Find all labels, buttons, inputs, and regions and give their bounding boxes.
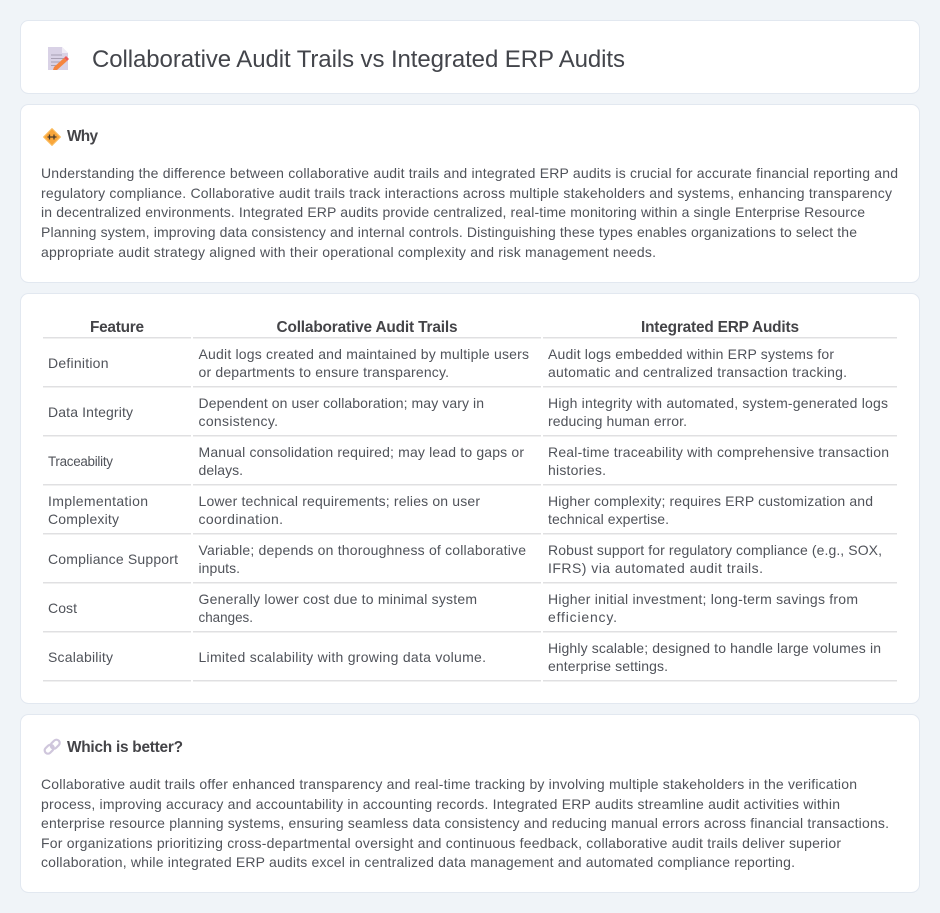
row: data integrity: Data Integrity [48,404,133,420]
text block: why: appropriate audit strategy aligned with their operational complexity and risk management needs. [41,244,656,260]
row: cost: Higher initial investment; long-term savings from [548,591,858,607]
row: scalability [48,640,881,674]
row: data integrity [48,395,888,429]
row: implementation complexity: Higher complexity; requires ERP customization and [548,493,873,509]
icon: link [43,738,61,755]
table header: Feature [90,319,144,336]
row: implementation complexity [48,493,873,527]
table header [90,319,799,336]
row: definition: Audit logs embedded within ERP systems for [548,346,834,362]
row: cost: Cost [48,600,77,616]
row: scalability: Scalability [48,649,113,665]
row: cost: Generally lower cost due to minimal system [198,591,477,607]
row: compliance support [48,542,882,576]
row: implementation complexity: technical expertise. [548,511,669,527]
row: scalability: Highly scalable; designed to handle large volumes in [548,640,881,656]
row: definition: automatic and centralized transaction tracking. [548,364,847,380]
row: data integrity: reducing human error. [548,413,687,429]
row: data integrity: Dependent on user collaboration; may vary in [198,395,484,411]
text block: which is better: collaboration, while integrated ERP audits excel in centralized data management and automated compliance reporting. [41,854,795,870]
table header: Integrated ERP Audits [641,319,799,336]
row: definition: Audit logs created and maintained by multiple users [198,346,529,362]
panel: comparison table [20,294,920,704]
panel: why [20,104,920,282]
text block: why: regulatory compliance. Collaborative audit trails track interactions across multiple stakeholders and systems, enhancing transparency [41,185,892,201]
text block: which is better [41,776,889,870]
row: implementation complexity: coordination. [198,511,283,527]
row: traceability [48,444,889,478]
row: compliance support: Robust support for regulatory compliance (e.g., SOX, [548,542,882,558]
row: definition: or departments to ensure transparency. [198,364,449,380]
row: implementation complexity: Implementation [48,493,148,509]
title: Collaborative Audit Trails vs Integrated ERP Audits [92,46,625,73]
text block: which is better: process, improving accuracy and accountability in accounting records. Integrated ERP audits streamline audit activities within [41,796,840,812]
text block: which is better: For organizations prioritizing cross-departmental oversight and continuous feedback, collaborative audit trails deliver superior [41,835,841,851]
row: scalability: Limited scalability with growing data volume. [198,649,486,665]
row: traceability: delays. [198,462,243,478]
row: implementation complexity: Lower technical requirements; relies on user [198,493,480,509]
text block: why: in decentralized environments. Integrated ERP audits provide centralized, real-time monitoring within a single Enterprise Resource [41,204,865,220]
row: traceability: Manual consolidation required; may lead to gaps or [198,444,524,460]
panel: which is better [20,714,920,892]
row: compliance support: inputs. [198,560,240,576]
text block: which is better: Collaborative audit trails offer enhanced transparency and real-time tracking by involving multiple stakeholders in the verification [41,776,857,792]
text block: which is better: enterprise resource planning systems, ensuring seamless data consistency and reducing manual errors across financial transactions. [41,815,889,831]
panel: header [20,20,920,94]
row: traceability: Traceability [48,454,113,469]
row: compliance support: IFRS) via automated audit trails. [548,560,763,576]
row: implementation complexity: Complexity [48,511,119,527]
row: cost: efficiency. [548,609,617,625]
heading: which is better: Which is better? [67,739,183,756]
table header: Collaborative Audit Trails [276,319,458,336]
heading: why: Why [67,128,98,145]
row: definition [48,346,847,380]
row: cost: changes. [198,610,253,625]
row: data integrity: High integrity with automated, system-generated logs [548,395,888,411]
text block: why: Understanding the difference between collaborative audit trails and integrated ERP audits is crucial for accurate financial reporting and [41,165,898,181]
icon: document with pencil [48,47,69,70]
row: traceability: Real-time traceability with comprehensive transaction [548,444,889,460]
text block: why [41,165,898,260]
icon: diamond sign [44,128,60,146]
row: compliance support: Variable; depends on thoroughness of collaborative [198,542,526,558]
row: traceability: histories. [548,462,606,478]
row: scalability: enterprise settings. [548,658,668,674]
row: compliance support: Compliance Support [48,551,178,567]
text block: why: Planning system, improving data consistency and internal controls. Distinguishing these types enables organizations to select the [41,224,857,240]
row: data integrity: consistency. [198,413,278,429]
row: cost [48,591,858,625]
row: definition: Definition [48,355,108,371]
